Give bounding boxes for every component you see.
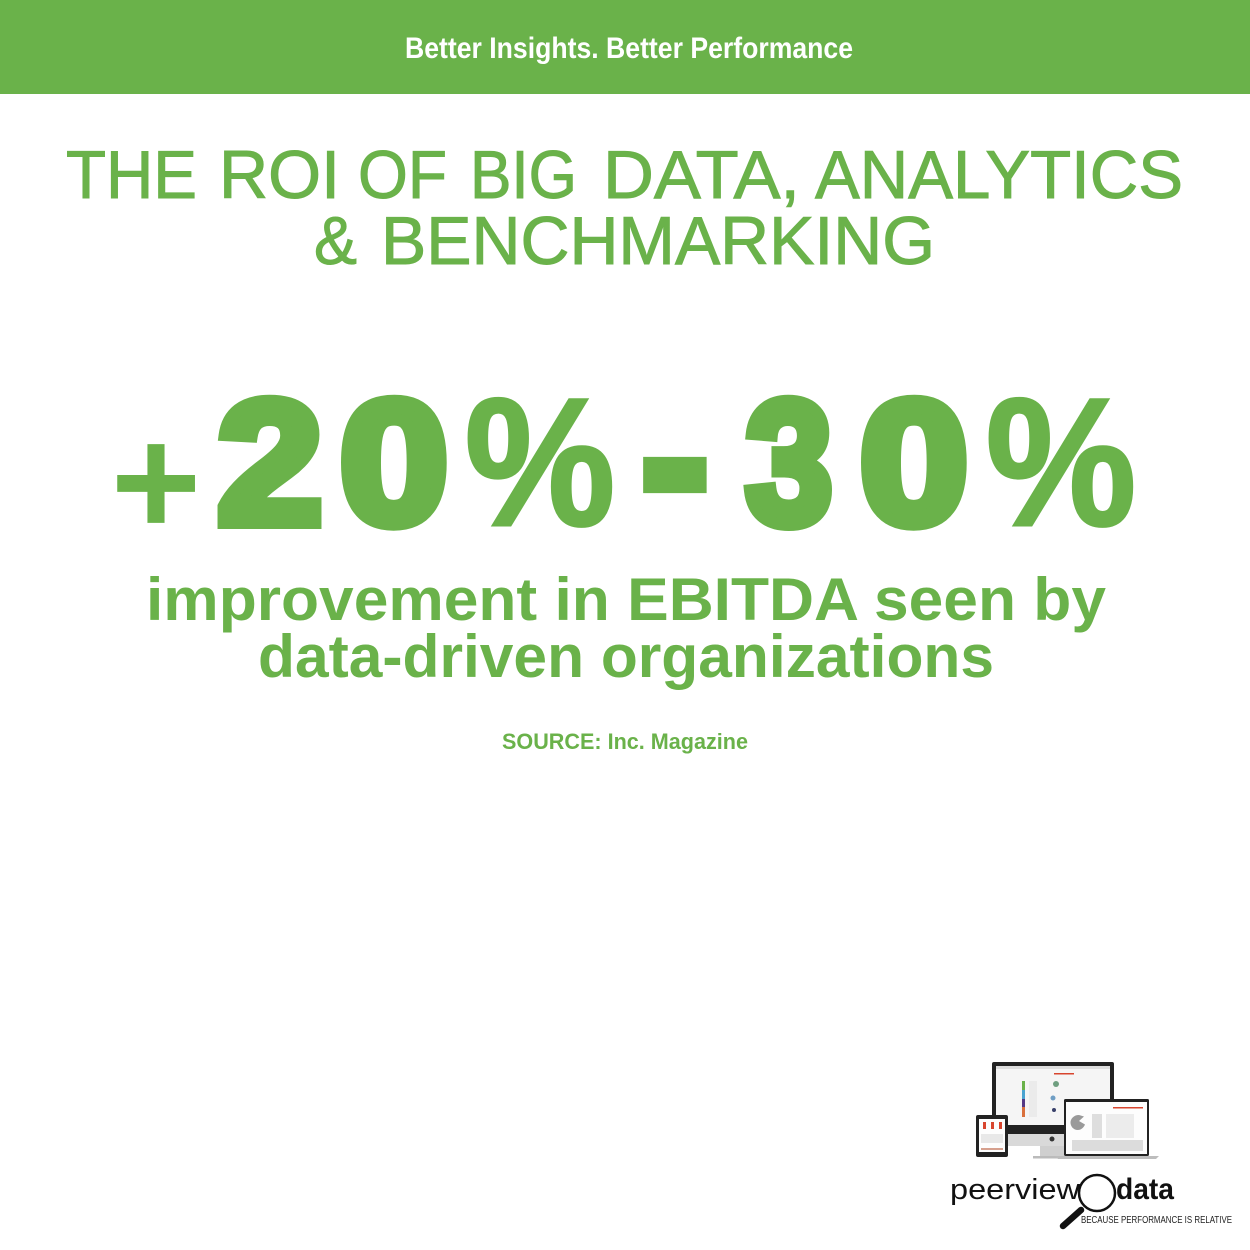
title: DATA, [603, 137, 800, 213]
title: ROI [219, 137, 340, 213]
title: BENCHMARKING [381, 203, 935, 279]
device mockups [976, 1062, 1159, 1159]
big statistic: 2 [217, 364, 323, 560]
big statistic: - [636, 300, 714, 602]
header banner [0, 0, 1250, 94]
big statistic: % [465, 361, 615, 564]
big statistic: 0 [340, 366, 448, 561]
big statistic [111, 300, 1136, 602]
icon: magnifying glass [1063, 1175, 1115, 1226]
title: THE [66, 137, 197, 213]
big statistic: % [986, 361, 1136, 564]
title: OF [358, 137, 447, 213]
logo text: peerview: peerview [950, 1174, 1081, 1206]
title: ANALYTICS [815, 137, 1183, 213]
peerviewdata logo [950, 1173, 1232, 1226]
title [66, 137, 1183, 279]
statistic description [146, 566, 1107, 690]
icon: desktop monitor [992, 1062, 1114, 1158]
logo text: data: data [1116, 1173, 1174, 1206]
header tagline: Better Insights. Better Performance [405, 32, 853, 65]
title: BIG [470, 137, 577, 213]
icon: tablet [976, 1115, 1008, 1157]
source: SOURCE: Inc. Magazine [502, 729, 748, 754]
statistic description: data-driven organizations [258, 623, 994, 690]
big statistic: + [111, 395, 201, 568]
title: & [314, 203, 357, 279]
big statistic: 3 [746, 366, 832, 561]
icon: laptop [1055, 1099, 1159, 1159]
statistic description: improvement in EBITDA seen by [146, 566, 1107, 633]
big statistic: 0 [860, 366, 968, 561]
